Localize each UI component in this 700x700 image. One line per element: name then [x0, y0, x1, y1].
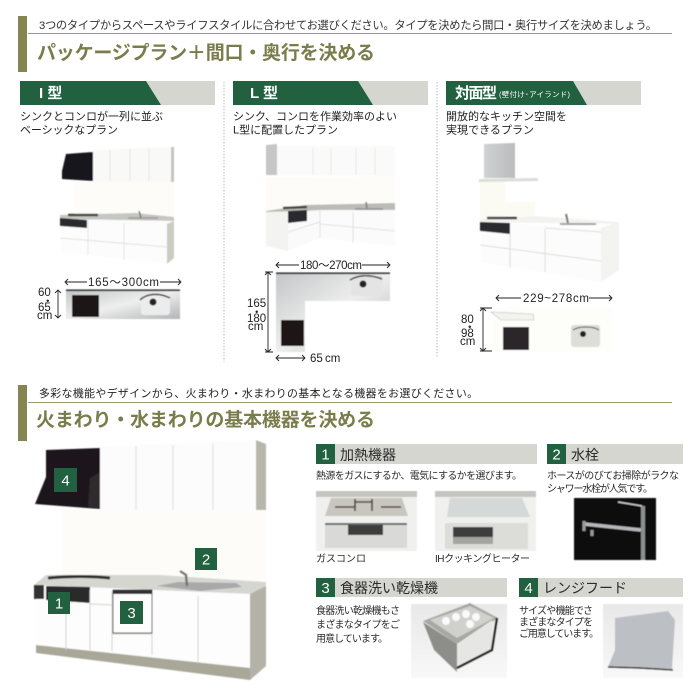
description: dishwasher: 食器洗い乾燥機もさ [316, 604, 400, 617]
description: faucet: ホースがのびてお掃除がラクな [547, 469, 679, 482]
photo: range hood [603, 604, 683, 678]
dimension: L type return: 65 [310, 353, 323, 365]
badge 1 [48, 592, 70, 614]
dimension: facing type width [496, 293, 612, 305]
dimension: L type return: cm [325, 353, 340, 365]
section header: package plan: パッケージプラン＋間口・奥行を決める [37, 42, 375, 64]
dimension: I type depth: ・ [42, 296, 54, 308]
tab: facing type: 対面型 [455, 84, 497, 102]
tab: I type [20, 81, 215, 105]
dimension: L type depth: 165 [247, 298, 266, 310]
description: heating: 熱源をガスにするか、電気にするかを選びます。 [316, 469, 522, 482]
photo: gas stove [316, 491, 417, 551]
description: dishwasher: まざまなタイプをご [316, 618, 400, 631]
divider: right [436, 82, 438, 358]
heading: faucet: 2 [552, 446, 561, 464]
tab: L type: L 型 [250, 85, 278, 102]
heading: heating equipment: 1 [321, 446, 330, 464]
panel 3: dishwasher [316, 578, 507, 678]
panel: I type [20, 81, 215, 322]
heading: heating equipment [316, 444, 537, 464]
heading: range hood: 4 [524, 580, 533, 597]
description: I type: ベーシックなプラン [20, 124, 118, 136]
badge 2: 2 [202, 552, 210, 568]
tab: facing type: (壁付け･アイランド) [499, 89, 570, 99]
dimension: facing type depth: ・ [464, 322, 476, 334]
badge 3: 3 [127, 605, 136, 622]
description: facing type: 開放的なキッチン空間を [446, 109, 567, 123]
dimension: L type depth: 180 [247, 313, 266, 325]
dimension: I type width [65, 277, 181, 289]
dimension: facing type width: 229~278cm [523, 293, 589, 305]
panel 4: range hood [519, 578, 683, 678]
heading: dishwasher: 食器洗い乾燥機 [340, 580, 438, 596]
description: I type: シンクとコンロが一列に並ぶ [20, 109, 163, 123]
heading: range hood: レンジフード [543, 580, 627, 596]
description: L type: L型に配置したプラン [233, 122, 338, 136]
kitchen photo: I type [60, 147, 174, 264]
tab: L type [233, 81, 428, 105]
plan view: L type [276, 272, 390, 352]
dimension: L type return [276, 353, 340, 365]
heading: dishwasher [316, 578, 507, 597]
dimension: facing type depth: 98 [461, 328, 474, 340]
plan view: facing type [491, 308, 612, 352]
description: faucet: シャワー水栓が人気です。 [547, 482, 653, 495]
heading: heating equipment: 加熱機器 [340, 447, 396, 463]
badge 3 [120, 601, 143, 624]
panel 1: heating equipment [316, 444, 537, 565]
tab: facing type [446, 81, 641, 105]
dimension: I type depth: cm [37, 310, 52, 322]
heading: range hood [519, 578, 683, 597]
dimension: I type depth: 60 [38, 287, 51, 299]
dimension: L type depth: cm [248, 321, 263, 333]
badge 4: 4 [61, 472, 70, 490]
badge 2 [195, 548, 217, 570]
label: gas stove: ガスコンロ [316, 553, 366, 565]
description: range hood: ご用意しています。 [519, 627, 599, 640]
badge 1: 1 [55, 596, 63, 612]
dimension: I type depth [37, 287, 61, 322]
panel: L type [233, 81, 428, 365]
tab: I type: I 型 [39, 85, 62, 102]
description: facing type: 実現できるプラン [446, 124, 534, 136]
panel 2: faucet [547, 444, 683, 560]
section header: basic equipment [18, 385, 672, 441]
heading: dishwasher: 3 [321, 580, 330, 597]
dimension: facing type depth: 80 [461, 314, 474, 326]
dimension: L type width: 180～270cm [300, 260, 362, 272]
photo: faucet [574, 498, 656, 560]
divider: left [223, 82, 225, 362]
dimension: L type depth: ・ [251, 307, 262, 319]
dimension: L type width [276, 260, 390, 272]
dimension: I type width: 165～300cm [88, 277, 159, 289]
section header: package plan: 3つのタイプからスペースやライフスタイルに合わせてお選びください。タイプを決めたら間口・奥行サイズを決めましょう。 [39, 18, 657, 32]
kitchen photo: facing type [479, 143, 619, 282]
dimension: I type depth: 65 [38, 302, 51, 314]
plan view: I type [66, 290, 180, 319]
description: range hood: サイズや機能でさ [519, 604, 593, 617]
description: range hood: まざまなタイプを [519, 616, 593, 628]
kitchen photo: L type [266, 144, 395, 251]
panel: facing type [446, 81, 641, 352]
description: L type: シンク、コンロを作業効率のよい [233, 110, 397, 123]
photo: IH heater [435, 491, 536, 551]
dimension: L type depth [247, 272, 273, 352]
heading: faucet [547, 444, 683, 464]
section header: basic equipment: 多彩な機能やデザインから、火まわり・水まわりの基本となる機器をお選びください。 [39, 386, 478, 400]
section header: basic equipment: 火まわり・水まわりの基本機器を決める [36, 409, 375, 431]
kitchen illustration with numbered callouts [34, 440, 266, 680]
section header: package plan [18, 16, 672, 72]
heading: faucet: 水栓 [571, 447, 599, 463]
photo: dishwasher [411, 603, 507, 678]
label: IH heater: IHクッキングヒーター [435, 552, 530, 565]
dimension: facing type depth: cm [460, 336, 475, 348]
kitchen drawing [34, 440, 266, 680]
description: dishwasher: 用意しています。 [316, 633, 388, 645]
badge 4 [54, 468, 77, 492]
dimension: facing type depth [460, 308, 492, 351]
